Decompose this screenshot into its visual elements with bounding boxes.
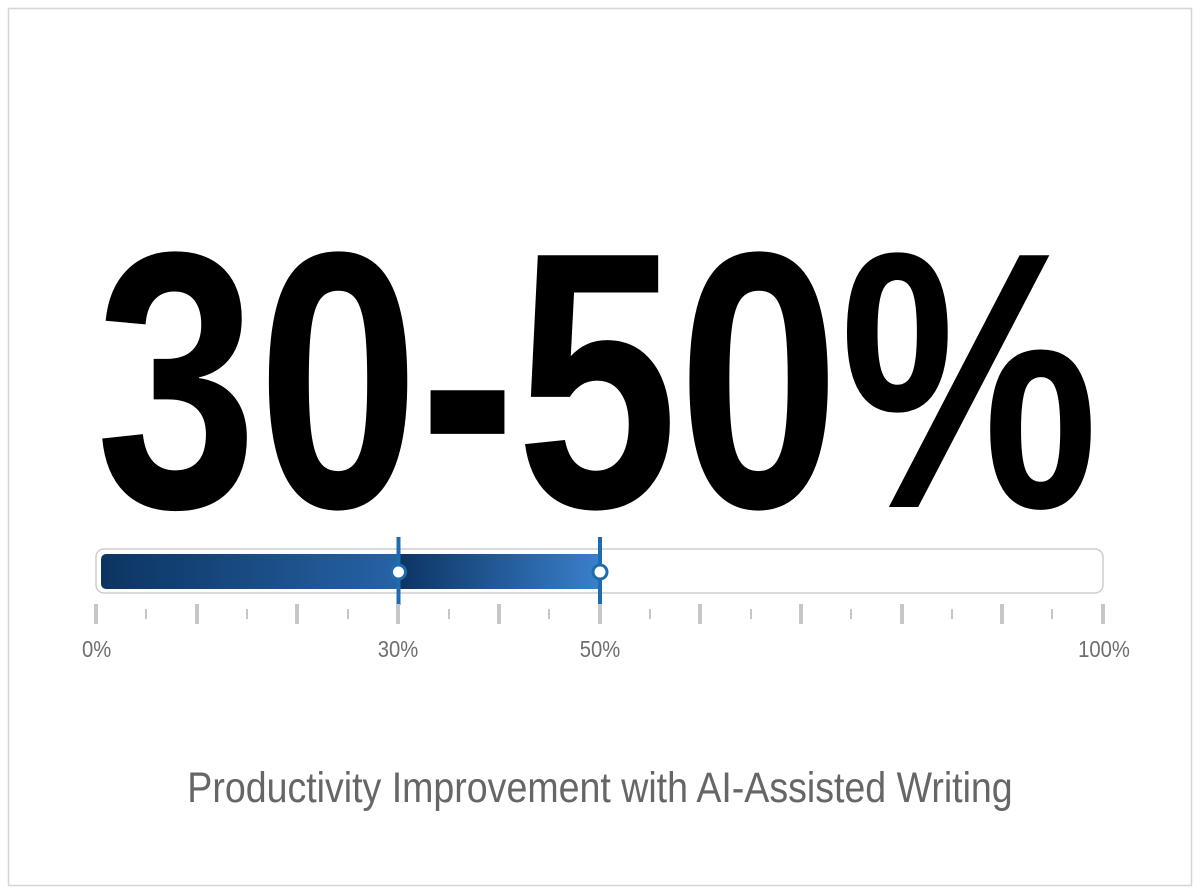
progress bar xyxy=(96,537,1103,605)
bar segment: 30-50% xyxy=(398,554,600,589)
marker: 30% xyxy=(392,537,406,605)
axis ticks xyxy=(96,604,1103,624)
title: big statistic: 30-50% xyxy=(96,177,1098,586)
axis labels xyxy=(82,636,1130,662)
axis labels: 100% xyxy=(1078,636,1130,662)
axis labels: 0% xyxy=(82,636,111,662)
subtitle: Productivity Improvement with AI-Assisted Writing xyxy=(187,763,1013,812)
bar segment: 0-30% xyxy=(101,554,401,589)
marker: 50% xyxy=(593,537,607,605)
axis labels: 30% xyxy=(378,636,418,662)
axis labels: 50% xyxy=(580,636,620,662)
